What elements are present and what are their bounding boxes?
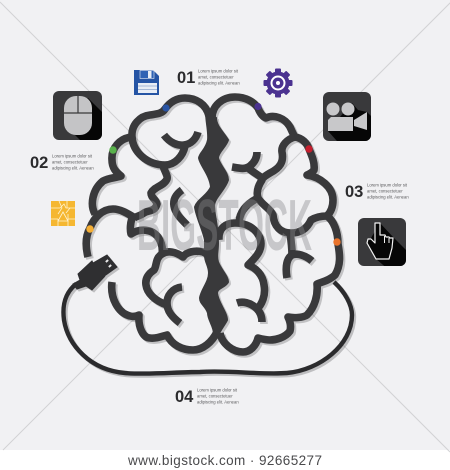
usb plug slots [105, 259, 112, 268]
text block 01: adipiscing elit. Aenean [198, 80, 240, 86]
number 03: 03 [345, 183, 363, 201]
icon: mouse tile [53, 91, 102, 140]
text block 03: Lorem ipsum dolor sit [367, 182, 408, 188]
icon: gear [264, 68, 292, 98]
icon: video camera tile [323, 92, 371, 141]
icon: chip card [51, 201, 75, 226]
text block 01: amet, consectetuer [198, 74, 234, 80]
text block 04: adipiscing elit. Aenean [197, 400, 239, 404]
text block 02: Lorem ipsum dolor sit [52, 154, 93, 158]
number 02: 02 [30, 154, 48, 172]
brain shadow [65, 99, 354, 376]
text block 02: amet, consectetuer [52, 160, 88, 164]
bottom credit strip [0, 450, 450, 470]
colored dots on brain [86, 103, 341, 246]
text block 04: amet, consectetuer [197, 394, 233, 398]
text block 04: Lorem ipsum dolor sit [197, 388, 238, 392]
brain outline with usb cable [63, 97, 352, 374]
number 01: 01 [177, 69, 195, 87]
icon: hand pointer tile [358, 218, 406, 266]
icon: floppy disk [134, 70, 159, 95]
text block 03: amet, consectetuer [367, 188, 403, 194]
text block 01: Lorem ipsum dolor sit [198, 68, 239, 74]
text block 02: adipiscing elit. Aenean [52, 166, 94, 170]
credit text: www.bigstock.com · 92665277 [127, 453, 322, 468]
text block 03: adipiscing elit. Aenean [367, 194, 409, 200]
number 04: 04 [175, 388, 194, 406]
